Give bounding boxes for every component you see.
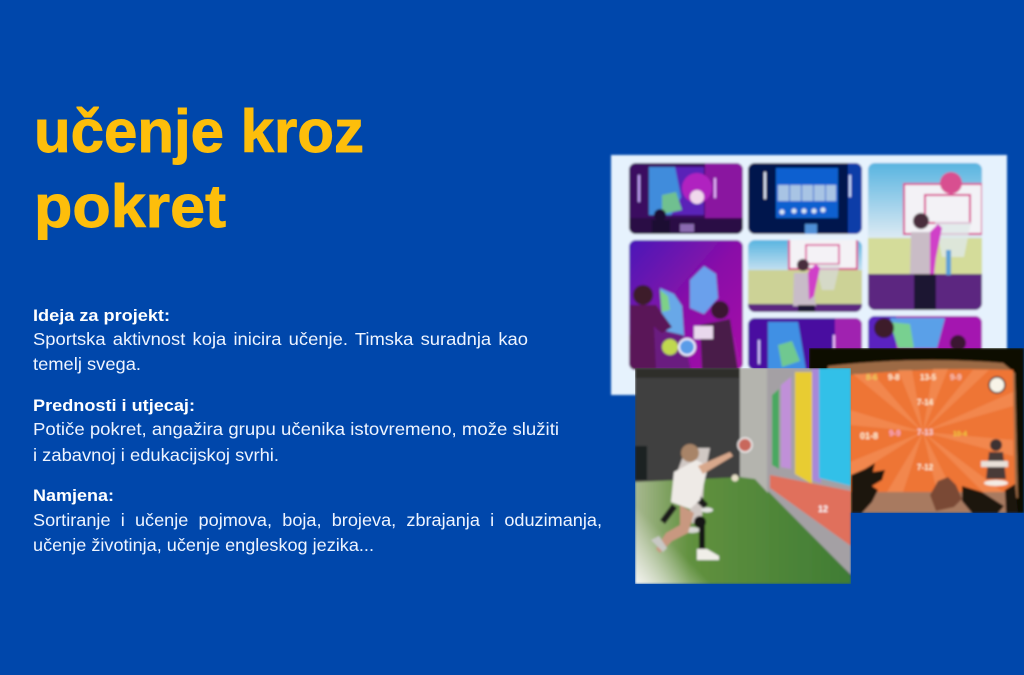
equations on wall: 8-6: [866, 373, 878, 382]
text block: ideja za projekt: Sportska aktivnost koja inicira učenje. Timska suradnja kao: [33, 329, 528, 349]
hands shadow: [851, 463, 885, 513]
photo tile: boy at basketball hoop: [868, 163, 982, 310]
text block: prednosti i utjecaj: i zabavnoj i edukacijskoj svrhi.: [33, 445, 279, 465]
vignette: [635, 512, 708, 584]
photo tile: two children at map wall: [629, 240, 743, 370]
equations on wall: 9-9: [889, 429, 901, 438]
red band: [770, 475, 851, 546]
text block: prednosti i utjecaj: [33, 396, 559, 465]
text block: prednosti i utjecaj: Potiče pokret, angažira grupu učenika istovremeno, može služiti: [33, 419, 559, 439]
photo: orange projection with children: [809, 348, 1024, 513]
equations on wall: 13-5: [920, 373, 937, 382]
text block: ideja za projekt: [33, 306, 528, 374]
equations on wall: 9-9: [950, 373, 962, 382]
photo tile: boy at hoop, wide: [748, 236, 862, 312]
photo tile: purple room with map: [629, 163, 743, 234]
floor: [635, 476, 851, 584]
text block: namjena: učenje životinja, učenje engleskog jezika...: [33, 535, 374, 555]
wall: [767, 368, 851, 575]
title: učenje kroz: [34, 98, 364, 165]
equations on wall: 7-14: [917, 398, 934, 407]
equations on wall: 7-13: [917, 428, 934, 437]
equations on wall: 10-4: [953, 431, 967, 438]
equations on wall: 7-12: [917, 463, 934, 472]
text block: ideja za projekt: Ideja za projekt:: [33, 306, 170, 325]
text block: ideja za projekt: temelj svega.: [33, 354, 141, 374]
equations on wall: 9-8: [888, 373, 900, 382]
text block: prednosti i utjecaj: Prednosti i utjecaj:: [33, 396, 195, 415]
photo tile: blue room with menu screen: [748, 163, 862, 234]
text block: namjena: Namjena:: [33, 486, 114, 505]
photo: girls throwing ball at projected wall: [635, 368, 851, 584]
equations on wall: 01-8: [860, 431, 878, 441]
projected colours: [772, 389, 779, 469]
text block: namjena: [33, 486, 602, 555]
photo: girls throwing ball at projected wall: 12: [818, 504, 828, 514]
title: [34, 98, 364, 240]
photo tile: map room close-up cropped: [868, 316, 982, 356]
panel: photo collage: [611, 155, 1007, 395]
photo tile: map room cropped: [748, 318, 862, 370]
sunburst rays: [850, 369, 1013, 492]
ninja figure: [990, 439, 1002, 451]
equations on wall: [860, 373, 967, 472]
ball: [738, 438, 752, 452]
girl front: [681, 444, 699, 462]
text block: namjena: Sortiranje i učenje pojmova, boja, brojeva, zbrajanja i oduzimanja,: [33, 510, 602, 530]
clock: [989, 377, 1005, 393]
curtain: [740, 368, 770, 493]
girl back: [678, 448, 710, 524]
title: pokret: [34, 173, 226, 240]
